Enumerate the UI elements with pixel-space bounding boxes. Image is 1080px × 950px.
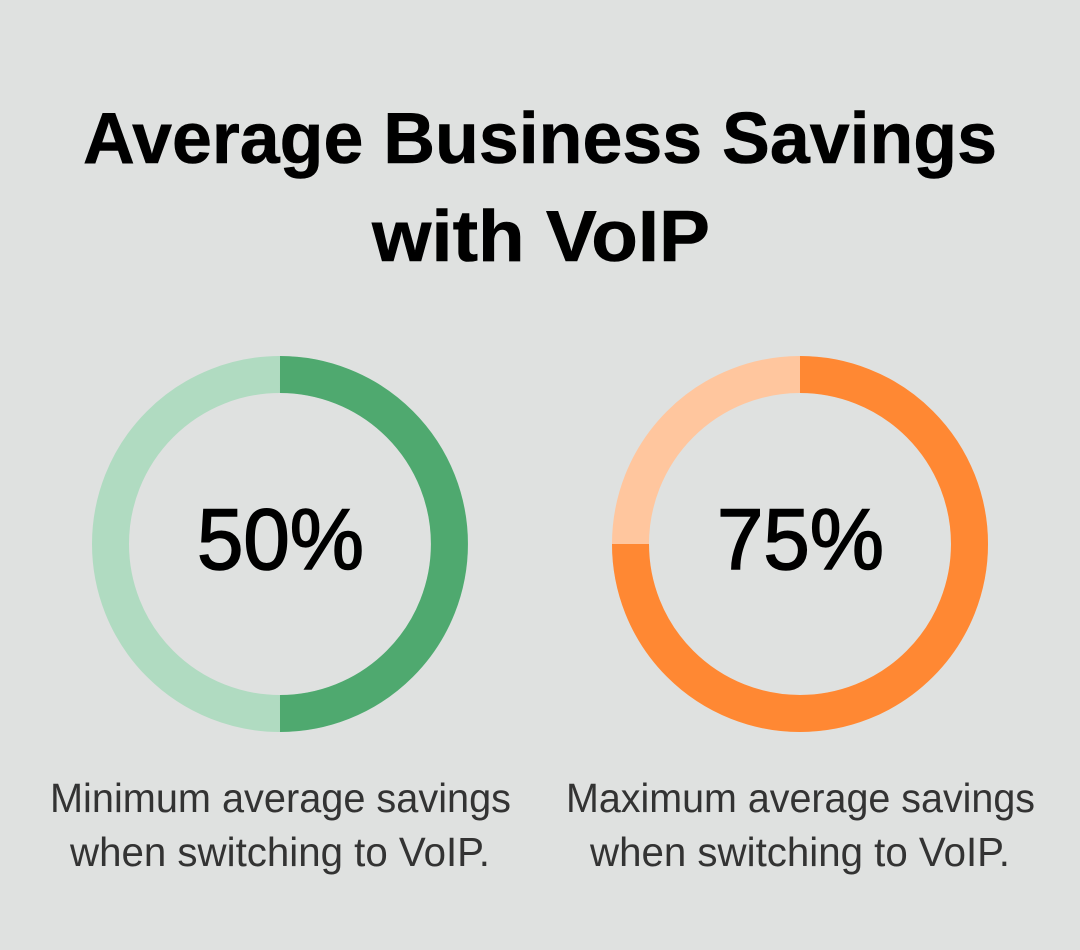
donut chart: 75% bbox=[630, 374, 970, 714]
panel: minimum savings bbox=[50, 374, 511, 875]
caption: maximum savings: when switching to VoIP. bbox=[589, 829, 1010, 875]
donut chart: 50% bbox=[110, 374, 450, 714]
panel: maximum savings bbox=[566, 374, 1035, 875]
caption: minimum savings: Minimum average savings bbox=[50, 775, 511, 821]
title: with VoIP bbox=[371, 197, 710, 277]
caption: minimum savings bbox=[50, 775, 511, 875]
caption: maximum savings bbox=[566, 775, 1035, 875]
title bbox=[83, 99, 997, 277]
title: Average Business Savings bbox=[83, 99, 997, 179]
value: 50%: 50% bbox=[197, 492, 364, 588]
caption: minimum savings: when switching to VoIP. bbox=[69, 829, 490, 875]
caption: maximum savings: Maximum average savings bbox=[566, 775, 1035, 821]
value: 75%: 75% bbox=[717, 492, 884, 588]
